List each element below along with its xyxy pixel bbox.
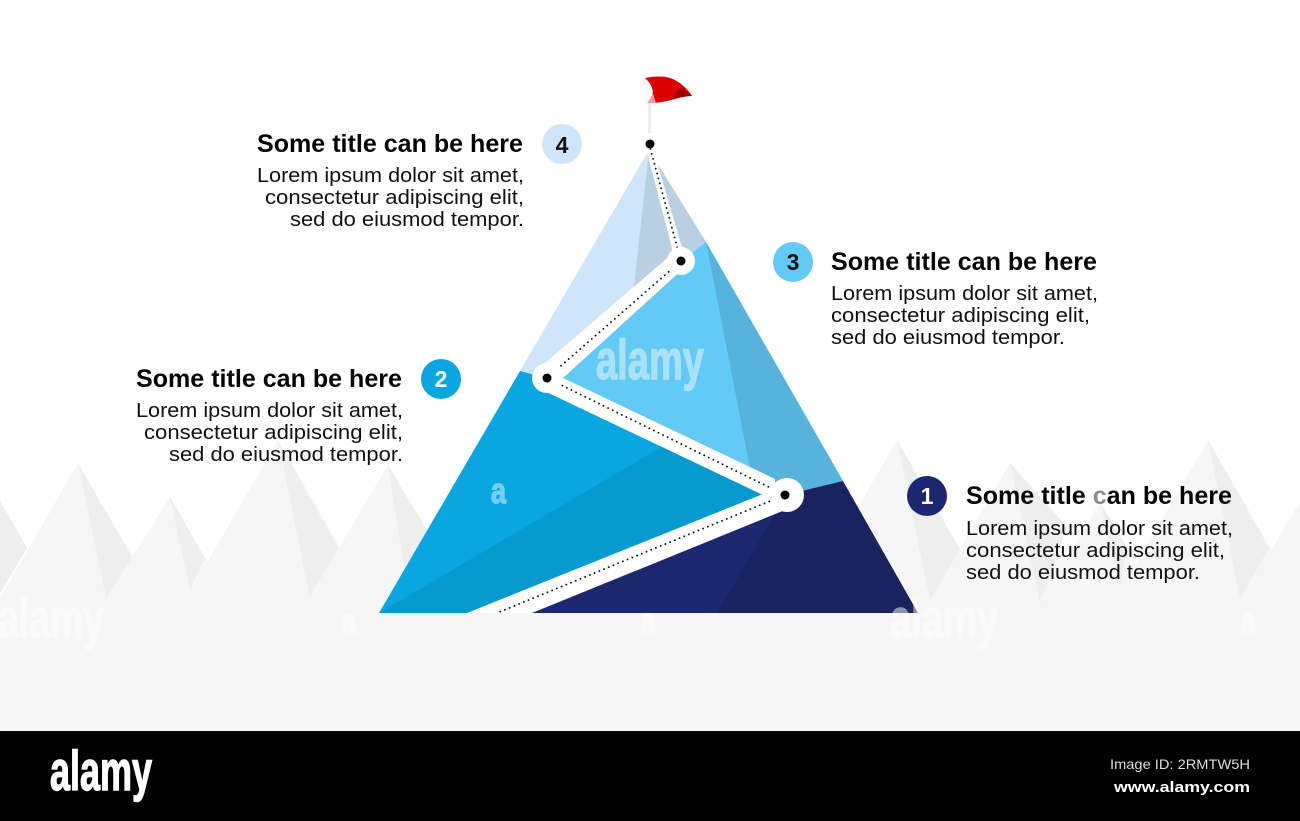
step 1 description: consectetur adipiscing elit, — [966, 539, 1225, 562]
step 2 description: consectetur adipiscing elit, — [144, 421, 403, 444]
step 1 title: Some title can be here — [966, 482, 1232, 510]
watermarks: a — [491, 470, 507, 511]
step 2 badge: 2 — [435, 366, 447, 392]
icon: red summit flag — [645, 76, 692, 133]
step 4 description: consectetur adipiscing elit, — [265, 186, 524, 209]
step 3 description — [831, 282, 1098, 349]
step 4 title: Some title can be here — [257, 130, 523, 158]
step 2 description: Lorem ipsum dolor sit amet, — [136, 399, 403, 422]
step 3 badge: 3 — [787, 249, 799, 275]
background mountain range — [0, 440, 1300, 731]
mountain section 1: base — [470, 481, 918, 613]
main mountain pyramid — [379, 140, 918, 613]
watermarks: a — [1241, 600, 1257, 641]
step 2 description: sed do eiusmod tempor. — [169, 443, 403, 466]
website: www.alamy.com — [1113, 779, 1250, 796]
mountain section 2 — [379, 371, 785, 613]
image id: Image ID: 2RMTW5H — [1110, 756, 1250, 772]
mountain section 4: summit — [520, 150, 706, 378]
watermarks — [0, 328, 1257, 650]
step 4 description: Lorem ipsum dolor sit amet, — [257, 164, 524, 187]
watermarks: alamy — [0, 587, 104, 650]
watermarks: alamy — [890, 587, 998, 650]
step 1 badge: 1 — [921, 483, 934, 509]
footer bar — [0, 731, 1300, 821]
footer logo: alamy — [50, 739, 152, 802]
step 3 description: sed do eiusmod tempor. — [831, 326, 1065, 349]
watermarks: a — [641, 600, 657, 641]
step 1 description: sed do eiusmod tempor. — [966, 561, 1200, 584]
step 1 badge — [907, 476, 947, 516]
path waypoints — [532, 140, 804, 512]
step 4 description — [257, 164, 524, 231]
watermarks: a — [341, 600, 357, 641]
step 1 description: Lorem ipsum dolor sit amet, — [966, 517, 1233, 540]
watermarks: alamy — [596, 328, 704, 391]
step 1 description — [966, 517, 1233, 584]
step 4 badge: 4 — [556, 132, 569, 158]
step 2 description — [136, 399, 403, 466]
step 2 title: Some title can be here — [136, 365, 402, 393]
step 3 badge — [773, 242, 813, 282]
climbing path — [467, 144, 790, 613]
step 4 badge — [542, 124, 582, 164]
step 3 description: Lorem ipsum dolor sit amet, — [831, 282, 1098, 305]
step 3 description: consectetur adipiscing elit, — [831, 304, 1090, 327]
step 2 badge — [421, 359, 461, 399]
step 4 description: sed do eiusmod tempor. — [290, 208, 524, 231]
mountain section 3 — [547, 242, 843, 495]
step 3 title: Some title can be here — [831, 248, 1097, 276]
